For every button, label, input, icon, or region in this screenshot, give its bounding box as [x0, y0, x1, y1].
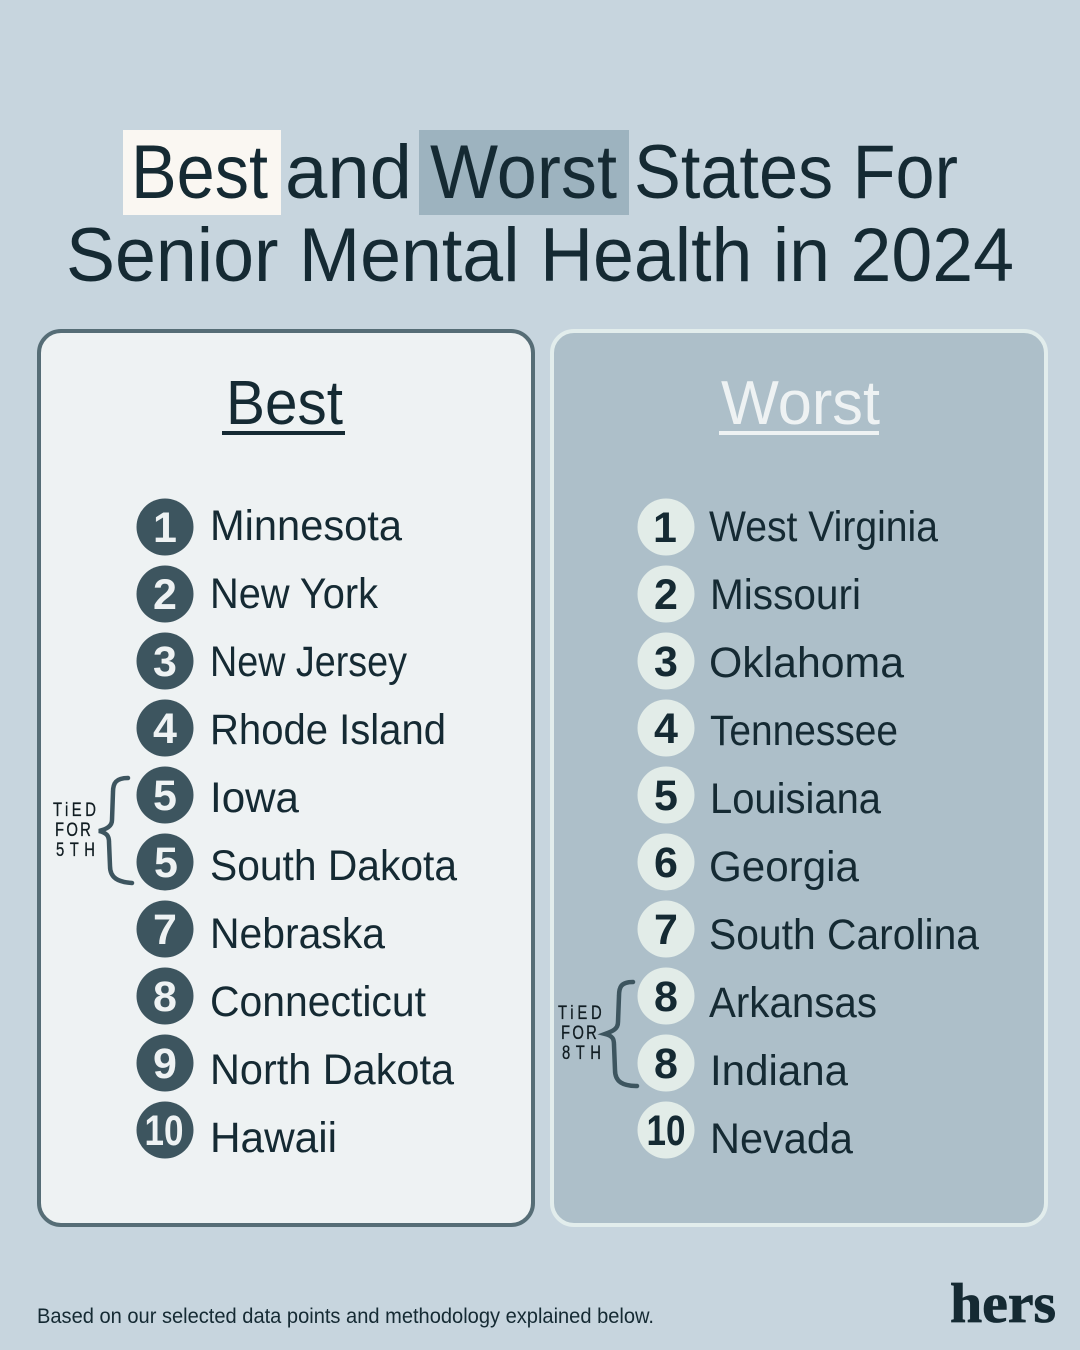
ranked list: best: New York: [210, 570, 378, 618]
logo: hers: hers: [950, 1273, 1056, 1335]
ranked list: worst: 7: [654, 906, 678, 954]
annotation: tied for 5th: [53, 778, 132, 883]
ranked list: worst: 2: [654, 571, 678, 619]
ranked list: worst: Missouri: [710, 571, 861, 619]
footnote: Based on our selected data points and methodology explained below.: [37, 1305, 654, 1328]
ranked list: best: New Jersey: [210, 638, 407, 686]
ranked list: best: Nebraska: [210, 910, 385, 958]
ranked list: best: 10: [144, 1107, 184, 1155]
ranked list: worst: 5: [654, 772, 678, 820]
ranked list: best: 1: [153, 504, 177, 552]
annotation: tied for 5th: FOR: [55, 819, 91, 840]
ranked list: best: 2: [153, 571, 177, 619]
ranked list: worst: 8: [654, 1040, 678, 1088]
annotation: tied for 8th: 8TH: [562, 1042, 601, 1063]
ranked list: best: 3: [153, 638, 177, 686]
ranked list: best: 9: [153, 1040, 177, 1088]
ranked list: best: South Dakota: [210, 842, 457, 890]
ranked list: best: Minnesota: [210, 502, 402, 550]
title: Worst: [430, 130, 617, 215]
title: States For: [634, 130, 958, 215]
ranked list: worst: 4: [654, 705, 678, 753]
ranked list: worst: Nevada: [710, 1115, 853, 1163]
ranked list: worst: Tennessee: [710, 707, 898, 755]
ranked list: best: 8: [153, 973, 177, 1021]
ranked list: best: Connecticut: [210, 978, 426, 1026]
ranked list: best: 7: [153, 906, 177, 954]
title: and: [285, 130, 412, 215]
ranked list: worst: [638, 498, 979, 1163]
annotation: tied for 5th: 5TH: [56, 839, 95, 860]
ranked list: best: 4: [153, 705, 177, 753]
ranked list: worst: 6: [654, 839, 678, 887]
highlight: best: [123, 130, 281, 215]
heading: worst: Worst: [721, 369, 880, 438]
ranked list: worst: West Virginia: [709, 503, 938, 551]
ranked list: worst: 1: [653, 504, 677, 552]
panel: worst: [552, 331, 1046, 1225]
ranked list: best: Rhode Island: [210, 706, 446, 754]
annotation: tied for 5th: TiED: [53, 799, 96, 820]
annotation: tied for 8th: TiED: [558, 1002, 602, 1023]
ranked list: worst: South Carolina: [709, 911, 979, 959]
ranked list: best: [136, 498, 457, 1162]
ranked list: best: North Dakota: [210, 1046, 454, 1094]
ranked list: best: 5: [154, 839, 178, 887]
highlight: worst: [419, 130, 629, 215]
ranked list: worst: Indiana: [710, 1047, 848, 1095]
annotation: tied for 8th: FOR: [561, 1022, 597, 1043]
ranked list: worst: Louisiana: [710, 775, 881, 823]
ranked list: best: 5: [153, 772, 177, 820]
ranked list: worst: Georgia: [709, 843, 859, 891]
ranked list: worst: 8: [654, 973, 678, 1021]
ranked list: best: Hawaii: [210, 1114, 337, 1162]
panel: best: [39, 331, 533, 1225]
ranked list: worst: 3: [654, 638, 678, 686]
ranked list: worst: Oklahoma: [709, 639, 904, 687]
ranked list: best: Iowa: [210, 774, 299, 822]
annotation: tied for 8th: [558, 982, 637, 1086]
ranked list: worst: 10: [646, 1107, 686, 1155]
title: Senior Mental Health in 2024: [66, 213, 1014, 298]
title: Best: [131, 130, 268, 215]
title: [66, 130, 1014, 298]
ranked list: worst: Arkansas: [709, 979, 877, 1027]
heading: best: Best: [226, 369, 343, 438]
